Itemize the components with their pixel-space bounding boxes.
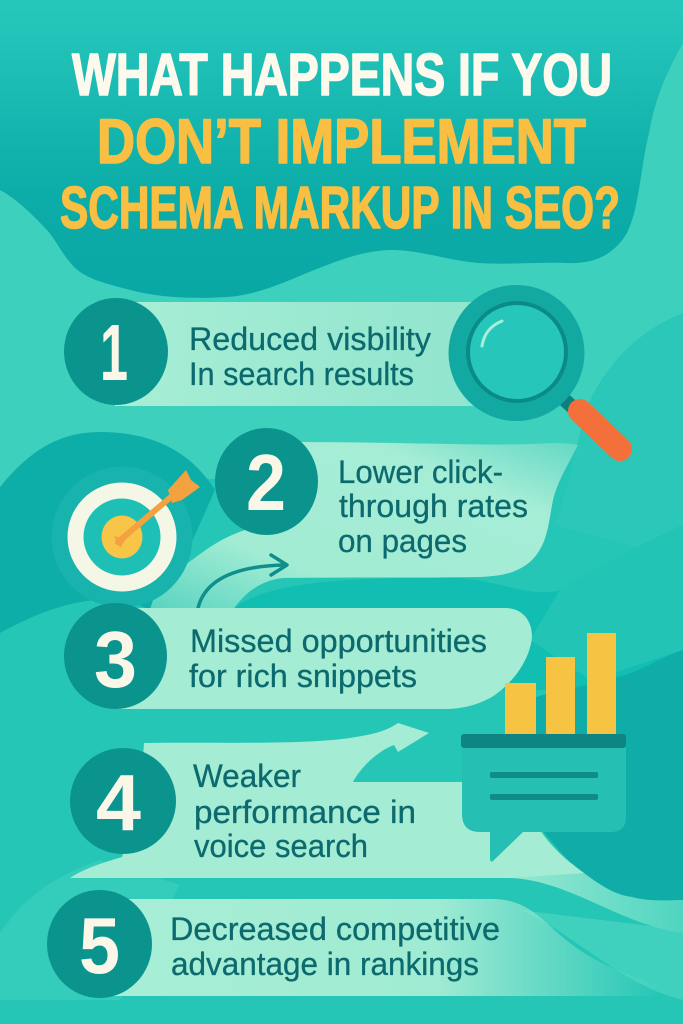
panel 5: decreased competitive advantage [47, 890, 660, 998]
panel 5 text: advantage in rankings [171, 946, 479, 982]
panel 1 ribbon [115, 302, 500, 406]
panel 1 text: In search results [189, 356, 414, 392]
title [60, 42, 620, 241]
bubble lines [490, 772, 598, 800]
panel 3 number [64, 603, 167, 709]
icon: magnifying glass [448, 285, 620, 449]
panel 5 text: Decreased competitive [170, 911, 500, 947]
panel 4 text [193, 758, 416, 864]
chart baseline [461, 734, 626, 748]
panel 3: missed opportunities [64, 603, 532, 709]
panel 5 number: 5 [79, 901, 120, 990]
bars [505, 633, 616, 735]
panel 4: weaker voice search [70, 723, 584, 878]
panel 1 number [64, 298, 168, 405]
panel 3 ribbon [115, 608, 532, 709]
panel 5 number [47, 890, 152, 998]
icon: bar chart on speech bubble [461, 633, 626, 862]
dark wave behind chart [500, 650, 683, 900]
panel 4 text: voice search [194, 828, 368, 864]
panel 4 text: Weaker [193, 758, 301, 794]
speech bubble [462, 745, 626, 862]
panel 5 ribbon [100, 899, 660, 996]
panel 2 text: through rates [339, 488, 528, 524]
panel 2: lower click-through rates [150, 428, 578, 610]
title line 2: DON’T IMPLEMENT [97, 107, 586, 177]
panel 2 text: on pages [338, 523, 467, 559]
panel 3 text [189, 623, 487, 694]
panel 1 number: 1 [100, 308, 128, 397]
panel 1 text [189, 321, 431, 392]
panel 2 ribbon [150, 442, 578, 610]
panel 4 ribbon with arrow [70, 723, 584, 878]
panel 1 text: Reduced visbility [189, 321, 431, 357]
panel 5 text [170, 911, 500, 982]
light band under chart [480, 850, 683, 933]
panel 4 number [70, 748, 176, 854]
panel 2 text [338, 454, 528, 559]
panel 1: reduced visibility [64, 298, 500, 406]
arrow: curved [198, 555, 287, 608]
panel 3 text: for rich snippets [189, 658, 417, 694]
panel 4 text: performance in [194, 794, 416, 830]
panel 2 number: 2 [246, 438, 286, 527]
panel 3 text: Missed opportunities [190, 623, 487, 659]
panel 4 number: 4 [96, 758, 142, 847]
panel 2 text: Lower click- [338, 454, 503, 490]
icon: target with arrow [52, 466, 200, 608]
top wave panel [0, 0, 683, 298]
panel 2 number [215, 428, 318, 535]
panel 3 number: 3 [94, 615, 137, 704]
